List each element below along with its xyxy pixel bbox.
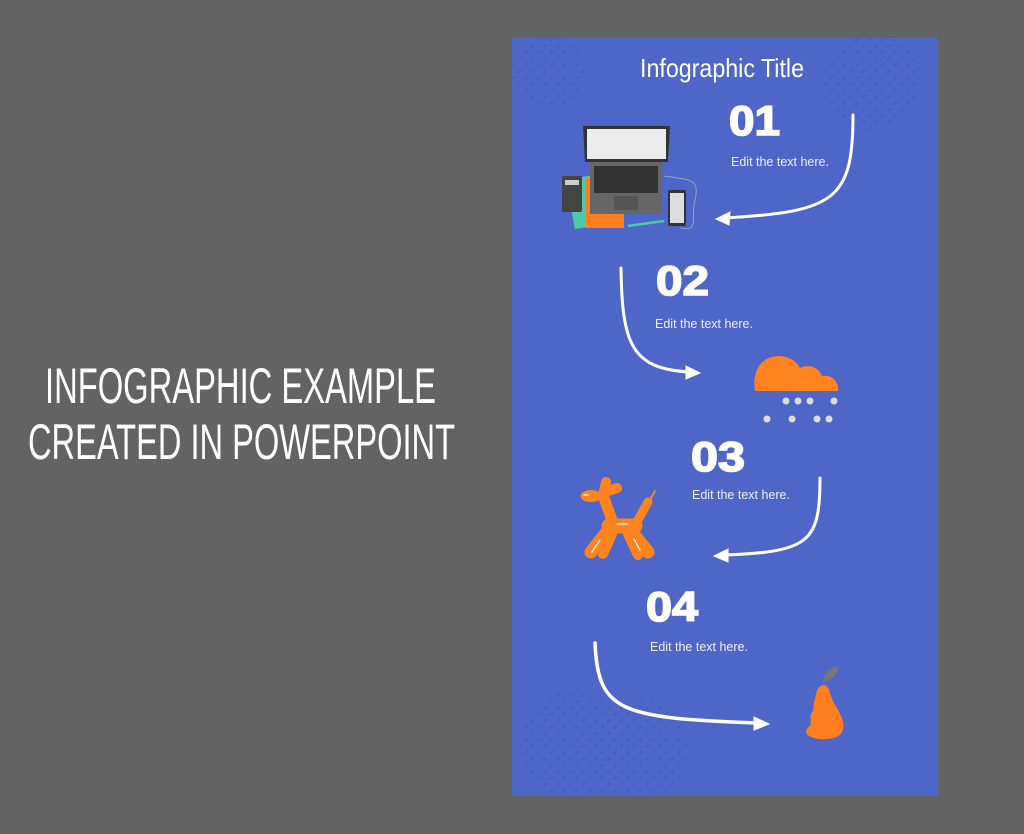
step 03: Edit the text here. (692, 488, 790, 502)
heading: infographic example (28, 358, 455, 470)
step 04: Edit the text here. (650, 640, 748, 654)
step 04 (646, 583, 748, 654)
arrow 4 (595, 643, 769, 730)
arrow 1 (716, 115, 853, 225)
step 01: Edit the text here. (731, 155, 829, 169)
heading: infographic example: INFOGRAPHIC EXAMPLE (45, 358, 436, 414)
panel: infographic (512, 34, 938, 800)
step 02 (655, 257, 753, 331)
icon: balloon dog (581, 482, 655, 555)
icon: rain cloud (754, 356, 838, 422)
step 01 (729, 97, 829, 169)
step 03: 03 (691, 433, 745, 480)
arrow 2 (621, 268, 700, 379)
step 01: 01 (729, 97, 780, 144)
icon: pear (806, 666, 843, 739)
heading: infographic example: CREATED IN POWERPOINT (28, 414, 455, 470)
icon: laptop desk (562, 126, 696, 229)
title: Infographic Title (640, 53, 804, 83)
step 02: Edit the text here. (655, 317, 753, 331)
arrow 3 (714, 478, 820, 562)
step 02: 02 (656, 257, 709, 304)
step 04: 04 (646, 583, 699, 630)
step 03 (691, 433, 790, 502)
